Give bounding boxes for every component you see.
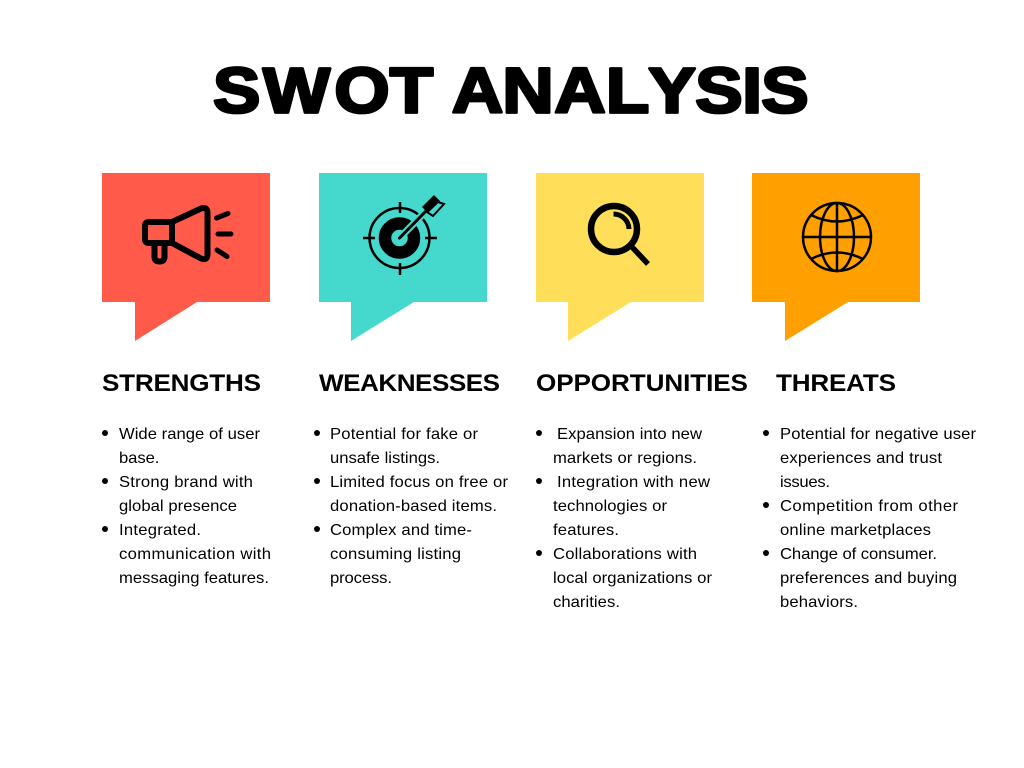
list: strengths: Wide range of user (119, 425, 261, 443)
list: threats: online marketplaces (780, 521, 931, 539)
list: strengths: base. (119, 449, 159, 467)
list: strengths: messaging features. (119, 569, 269, 587)
panel: opportunities (536, 173, 748, 611)
list: weaknesses: unsafe listings. (330, 449, 440, 467)
list: threats: Change of consumer. (780, 545, 937, 563)
list: opportunities: Expansion into new (557, 425, 702, 443)
list: strengths: Strong brand with (119, 473, 253, 491)
list: strengths: communication with (119, 545, 271, 563)
list: weaknesses: donation-based items. (330, 497, 497, 515)
list: threats: issues. (780, 473, 830, 491)
list: weaknesses: Limited focus on free or (330, 473, 509, 491)
list: threats: experiences and trust (780, 449, 942, 467)
list: opportunities: local organizations or (553, 569, 713, 587)
icon: globe (803, 203, 871, 271)
list: opportunities: Integration with new (557, 473, 710, 491)
speech bubble: strengths (102, 173, 270, 341)
list: threats: Potential for negative user (780, 425, 977, 443)
list: opportunities: features. (553, 521, 619, 539)
list: weaknesses: Complex and time- (330, 521, 472, 539)
list: weaknesses: consuming listing (330, 545, 461, 563)
heading: strengths: STRENGTHS (102, 370, 261, 397)
icon: target with arrow (363, 195, 444, 275)
list: opportunities: technologies or (553, 497, 668, 515)
speech bubble: threats (752, 173, 920, 341)
title: SWOT ANALYSIS (213, 56, 809, 127)
heading: opportunities: OPPORTUNITIES (536, 370, 748, 397)
panel: strengths (102, 173, 271, 587)
list: strengths (102, 425, 271, 587)
list: threats (763, 425, 977, 611)
list: opportunities (536, 425, 713, 611)
list: threats: preferences and buying (780, 569, 957, 587)
icon: megaphone (145, 208, 231, 262)
list: opportunities: markets or regions. (553, 449, 697, 467)
list: weaknesses: process. (330, 569, 392, 587)
list: opportunities: charities. (553, 593, 620, 611)
heading: threats: THREATS (776, 370, 896, 397)
list: threats: behaviors. (780, 593, 858, 611)
list: strengths: Integrated. (119, 521, 201, 539)
list: threats: Competition from other (780, 497, 959, 515)
list: strengths: global presence (119, 497, 237, 515)
list: opportunities: Collaborations with (553, 545, 697, 563)
list: weaknesses (314, 425, 509, 587)
heading: weaknesses: WEAKNESSES (319, 370, 500, 397)
panel: threats (752, 173, 977, 611)
speech bubble: opportunities (536, 173, 704, 341)
list: weaknesses: Potential for fake or (330, 425, 479, 443)
icon: magnifying glass (591, 206, 648, 264)
panel: weaknesses (314, 173, 509, 587)
speech bubble: weaknesses (319, 173, 487, 341)
